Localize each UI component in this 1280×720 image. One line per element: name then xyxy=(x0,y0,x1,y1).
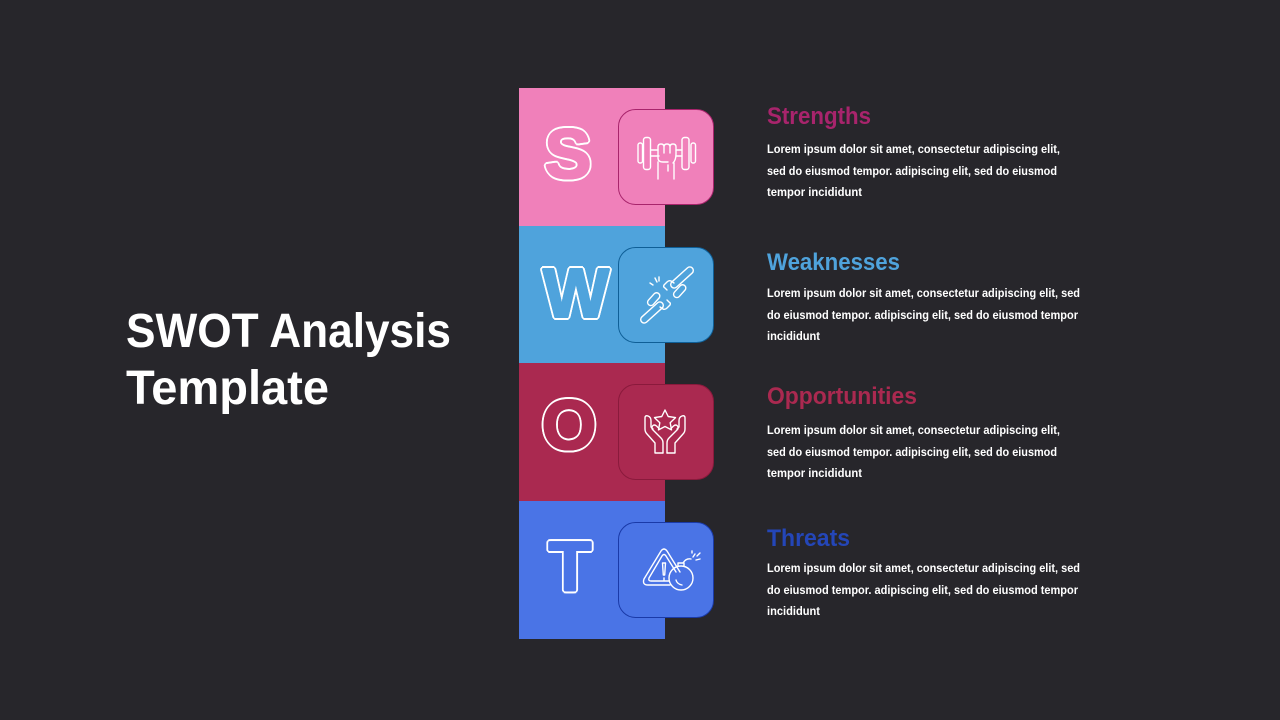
text: strengths description: tempor incididunt xyxy=(767,185,862,199)
letter S: S xyxy=(545,115,591,193)
title: Template xyxy=(126,362,329,415)
panel: opportunities block xyxy=(519,363,665,501)
text: weaknesses description: Lorem ipsum dolor sit amet, consectetur adipiscing elit, sed xyxy=(767,286,1080,300)
text: threats description: do eiusmod tempor. adipiscing elit, sed do eiusmod tempor xyxy=(767,583,1078,597)
text: strengths description: Lorem ipsum dolor sit amet, consectetur adipiscing elit, xyxy=(767,142,1060,156)
icon card: hands with star xyxy=(618,384,714,480)
text: threats description xyxy=(767,561,1080,618)
text: strengths description xyxy=(767,142,1060,199)
icon card: warning and bomb xyxy=(618,522,714,618)
title: SWOT Analysis xyxy=(126,305,451,358)
icon card: dumbbell xyxy=(618,110,714,204)
text: threats description: Lorem ipsum dolor sit amet, consectetur adipiscing elit, sed xyxy=(767,561,1080,575)
panel: weaknesses block xyxy=(519,226,665,363)
icon card: broken chain xyxy=(618,248,714,342)
text: opportunities description: Lorem ipsum dolor sit amet, consectetur adipiscing elit, xyxy=(767,423,1060,437)
text: opportunities description: sed do eiusmod tempor. adipiscing elit, sed do eiusmod xyxy=(767,445,1057,459)
letter O: O xyxy=(542,386,596,464)
text: weaknesses description: incididunt xyxy=(767,329,820,343)
heading: Threats: Threats xyxy=(767,525,850,552)
text: weaknesses description: do eiusmod tempor. adipiscing elit, sed do eiusmod tempor xyxy=(767,308,1078,322)
letter W: W xyxy=(543,254,609,332)
title xyxy=(126,305,451,415)
panel: strengths block xyxy=(519,88,665,226)
panel: threats block xyxy=(519,501,665,639)
text: weaknesses description xyxy=(767,286,1080,343)
text: opportunities description: tempor incididunt xyxy=(767,466,862,480)
letter T: T xyxy=(549,527,591,605)
text: strengths description: sed do eiusmod tempor. adipiscing elit, sed do eiusmod xyxy=(767,164,1057,178)
text: threats description: incididunt xyxy=(767,604,820,618)
heading: Strengths: Strengths xyxy=(767,103,871,130)
text: opportunities description xyxy=(767,423,1060,480)
heading: Opportunities: Opportunities xyxy=(767,383,917,410)
heading: Weaknesses: Weaknesses xyxy=(767,249,900,276)
